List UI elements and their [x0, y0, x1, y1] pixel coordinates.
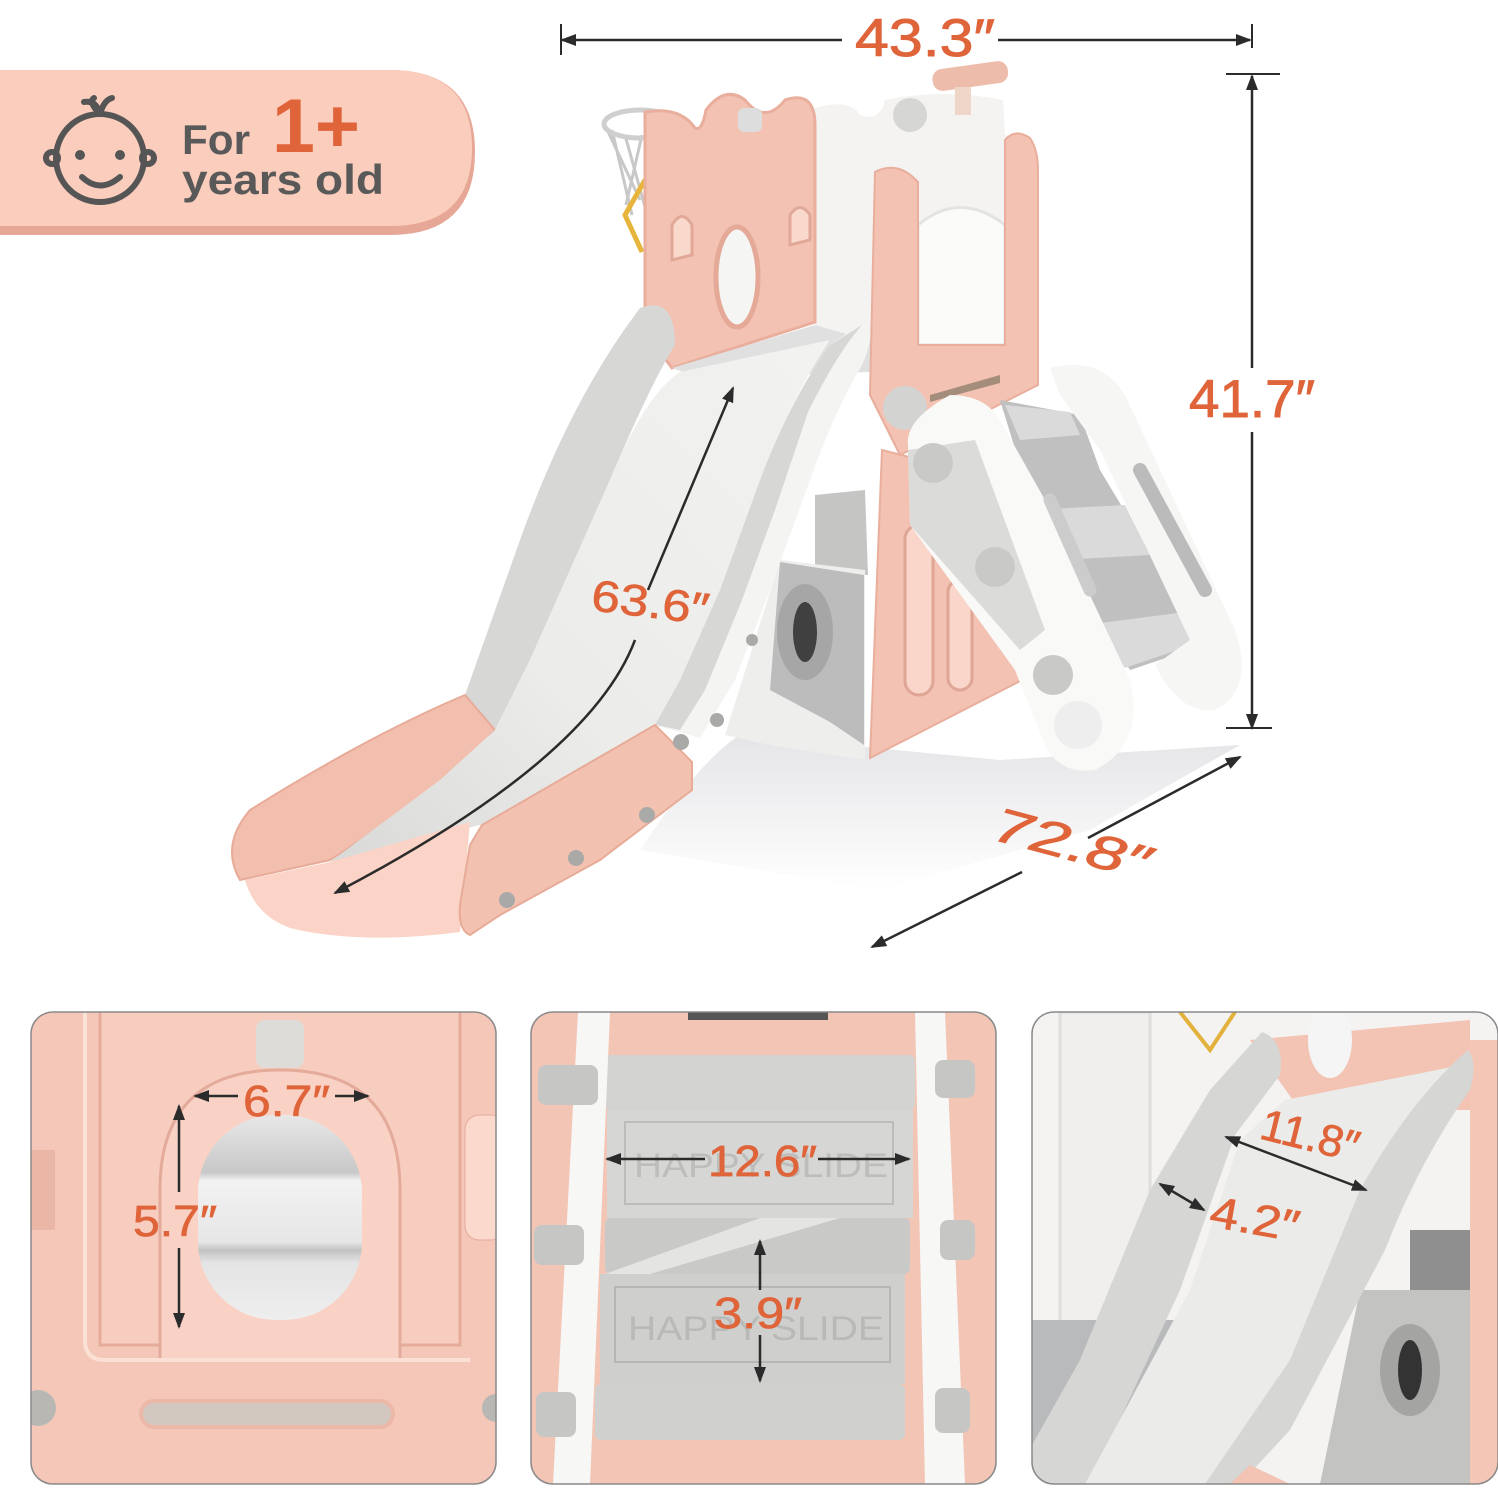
tower platform	[672, 325, 885, 378]
slide bed	[330, 340, 830, 862]
slide right rail	[655, 322, 870, 738]
ladder steps	[1000, 400, 1190, 670]
floor shadow	[640, 735, 1240, 890]
icon: baby face	[46, 98, 154, 202]
product: slide tower	[232, 60, 1242, 938]
age badge	[0, 70, 475, 235]
white back wall	[815, 94, 1030, 370]
panel: ladder detail	[531, 1012, 996, 1484]
hoop	[604, 110, 676, 252]
storage / rear wall	[815, 490, 868, 575]
icon: telescope	[931, 60, 1009, 115]
step labels: HAPPY SLIDE	[634, 1147, 888, 1185]
dimension: slide 63.6	[335, 388, 733, 893]
dimension: width 43.3: 43.3″	[855, 9, 995, 68]
dimensions: ladder: 12.6″	[708, 1137, 817, 1186]
badge text: years old	[182, 156, 384, 203]
dimensions: doorway: 5.7″	[133, 1197, 217, 1246]
dimensions: ladder: 3.9″	[714, 1289, 802, 1338]
slide left rail	[465, 305, 675, 730]
dimension: length 72.8: 72.8″	[982, 800, 1163, 889]
panel: slide detail	[1032, 1002, 1498, 1484]
dimensions: slide width: 4.2″	[1206, 1188, 1303, 1251]
dimension: width 43.3	[561, 9, 1252, 68]
badge text	[182, 84, 384, 203]
dimension: slide 63.6: 63.6″	[589, 571, 712, 634]
pink front pillars	[870, 133, 1038, 455]
slide lip	[245, 822, 470, 938]
dimensions: doorway	[133, 1077, 368, 1327]
dimensions: ladder	[607, 1137, 909, 1381]
bolts	[499, 634, 758, 908]
far ladder rail	[1050, 365, 1242, 710]
badge text: 1+	[272, 84, 360, 169]
panel: ladder detail: HAPPY SLIDE	[628, 1310, 884, 1348]
dimensions: slide width: 11.8″	[1256, 1100, 1364, 1172]
dimension: height 41.7	[1189, 74, 1315, 728]
dimension: length 72.8	[872, 757, 1240, 947]
panel: doorway detail	[20, 1012, 510, 1484]
dimensions: doorway: 6.7″	[243, 1077, 330, 1126]
dimension: height 41.7: 41.7″	[1189, 370, 1315, 429]
near ladder rail	[908, 395, 1133, 771]
pink castle wall	[645, 94, 815, 368]
badge text: For	[182, 116, 250, 163]
dimensions: slide width	[1160, 1100, 1366, 1251]
